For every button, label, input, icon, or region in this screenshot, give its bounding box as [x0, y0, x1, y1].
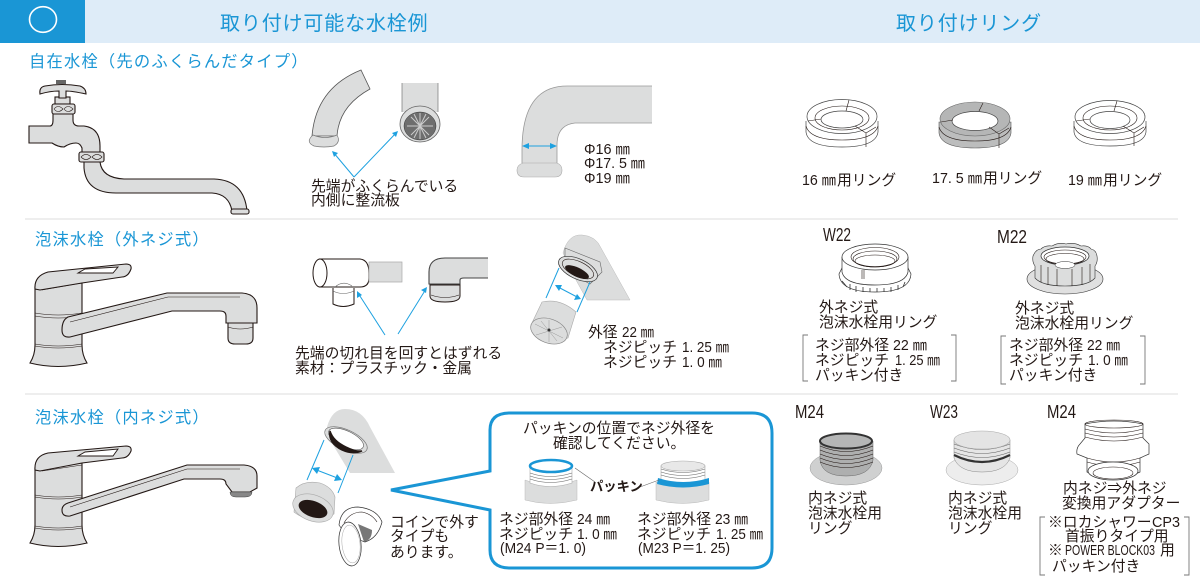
text: external thread spec: 1. 0 ㎜	[682, 355, 722, 371]
icon: spout end with flow plate	[400, 83, 440, 142]
text: adapter name: 変換用アダプター	[1062, 495, 1180, 512]
icon: M24 seat diagram	[525, 460, 577, 504]
text: M22 ring name: 外ネジ式	[1015, 300, 1074, 317]
section title: 外ネジ式: 泡沫水栓（外ネジ式）	[35, 231, 210, 249]
section title: 自在水栓: 自在水栓（先のふくらんだタイプ）	[29, 53, 309, 71]
callout: M22 spec: ネジ部外径	[1009, 337, 1083, 354]
text: M24 spec: (M24 P＝1. 0)	[500, 541, 586, 557]
icon: lever faucet, external thread	[30, 264, 257, 366]
callout: adapter notes	[1040, 515, 1189, 575]
section title: 内ネジ式: 泡沫水栓（内ネジ式）	[35, 409, 210, 427]
text: external thread spec: 22 ㎜	[622, 325, 654, 341]
bubble heading	[523, 420, 715, 452]
text: flared tip note	[311, 178, 458, 209]
callout: M22 spec	[1001, 336, 1145, 384]
text: M24 spec: ネジピッチ	[499, 526, 573, 543]
text: M23 spec: 23 ㎜	[715, 512, 748, 528]
callout: adapter notes: 用	[1160, 543, 1175, 559]
text: M24 spec: 1. 0 ㎜	[577, 527, 617, 543]
text: cut-line note	[295, 345, 502, 377]
text: coin note: タイプも	[390, 528, 449, 545]
header band	[0, 0, 1200, 43]
text: external thread spec: 1. 25 ㎜	[682, 340, 729, 356]
callout: W22 spec	[803, 335, 956, 384]
text: adapter name: 内ネジ⇒外ネジ	[1063, 480, 1167, 497]
callout: M22 spec: 22 ㎜	[1087, 338, 1120, 354]
text: W22 ring name: 外ネジ式	[819, 299, 878, 316]
icon: wall faucet	[29, 80, 249, 214]
text: M23 spec: ネジピッチ	[637, 526, 711, 543]
text: M24 ring name: リング	[808, 520, 853, 537]
text: cut-line note: 素材：プラスチック・金属	[295, 360, 472, 377]
label: M22: M22	[997, 227, 1027, 247]
text: ring size labels: 用リング	[837, 172, 896, 189]
bubble heading: 確認してください。	[553, 435, 685, 452]
icon: lever faucet, internal thread	[30, 446, 257, 546]
text: M22 ring name: 泡沫水栓用リング	[1015, 315, 1134, 332]
text: diameters: Φ19 ㎜	[584, 171, 630, 187]
label: packing: パッキン	[590, 479, 643, 494]
text: ring size labels: 17. 5 ㎜	[932, 171, 982, 187]
callout: M22 spec: 1. 0 ㎜	[1088, 353, 1128, 369]
callout: adapter notes: ※	[1048, 543, 1063, 559]
text: M24 ring name: 内ネジ式	[808, 490, 867, 507]
callout: adapter notes: POWER BLOCK03	[1065, 543, 1155, 559]
text: W23 ring name	[948, 490, 1022, 537]
text: coin note: コインで外す	[390, 514, 479, 531]
text: ring size labels: 16 ㎜	[802, 173, 836, 189]
text: external thread spec	[588, 324, 729, 371]
callout: adapter notes: CP3	[1152, 515, 1180, 531]
callout: W22 spec: ネジピッチ	[815, 352, 889, 369]
callout: M22 spec: ネジピッチ	[1009, 352, 1083, 369]
text: cut-line note: 先端の切れ目を回すとはずれる	[295, 345, 502, 362]
icon: T-shaped tip	[313, 259, 402, 306]
callout: M22 spec: パッキン付き	[1009, 367, 1097, 384]
icon: 19mm ring	[1074, 100, 1146, 146]
text: M23 spec	[637, 511, 763, 557]
header band: 取り付け可能な水栓例	[220, 12, 428, 35]
text: W23 ring name: 内ネジ式	[948, 490, 1007, 507]
icon: bent tip	[429, 258, 488, 302]
icon: M24 adapter	[1077, 420, 1149, 480]
text: adapter name	[1062, 480, 1180, 512]
text: M23 spec: (M23 P＝1. 25)	[638, 541, 730, 557]
text: external thread spec: ネジピッチ	[603, 339, 677, 356]
callout: adapter notes: ※ロカシャワー	[1048, 515, 1152, 531]
text: ring size labels: 用リング	[1103, 172, 1162, 189]
icon: M24 ring	[810, 434, 882, 485]
icon: W23 ring	[946, 431, 1018, 485]
text: W22 ring name	[819, 299, 938, 331]
callout: adapter notes: 首振りタイプ用	[1065, 528, 1169, 545]
icon: W22 ring	[839, 244, 911, 292]
text: diameters: Φ16 ㎜	[584, 142, 630, 158]
arrows: flared tip pointers	[332, 131, 398, 177]
text: diameters: Φ17. 5 ㎜	[584, 156, 645, 172]
callout: adapter notes: パッキン付き	[1052, 558, 1140, 575]
text: M23 spec: ネジ部外径	[637, 511, 711, 528]
text: M24 spec: ネジ部外径	[499, 511, 573, 528]
icon: curved spout	[309, 70, 370, 147]
icon: 17.5mm ring	[939, 102, 1011, 148]
header band: 取り付けリング	[896, 12, 1042, 35]
text: M22 ring name	[1015, 300, 1134, 332]
label: M24 left: M24	[795, 402, 824, 422]
text: flared tip note: 内側に整流板	[311, 192, 400, 209]
icon: exploded aerator, internal thread	[289, 409, 395, 527]
text: W23 ring name: 泡沫水栓用	[948, 505, 1022, 522]
text: W22 ring name: 泡沫水栓用リング	[819, 314, 938, 331]
icon: elbow spout with diameter arrow	[517, 86, 652, 177]
text: external thread spec: 外径	[588, 324, 618, 341]
text: ring size labels	[802, 170, 1162, 189]
text: M24 spec	[499, 511, 617, 557]
callout: W22 spec: ネジ部外径	[815, 337, 889, 354]
text: M24 spec: 24 ㎜	[577, 512, 610, 528]
text: M24 ring name	[808, 490, 882, 537]
text: M24 ring name: 泡沫水栓用	[808, 505, 882, 522]
leader lines	[575, 468, 659, 487]
text: ring size labels: 用リング	[983, 170, 1042, 187]
label: M24 right: M24	[1047, 402, 1076, 422]
arrows: cut-line pointers	[357, 287, 427, 335]
callout: W22 spec: 22 ㎜	[893, 338, 927, 354]
text: ring size labels: 19 ㎜	[1068, 173, 1102, 189]
text: external thread spec: ネジピッチ	[603, 354, 677, 371]
text: coin note: あります。	[390, 544, 463, 561]
label: W22: W22	[823, 225, 851, 245]
text: M23 spec: 1. 25 ㎜	[716, 527, 763, 543]
callout: W22 spec: 1. 25 ㎜	[895, 353, 940, 369]
label: W23: W23	[930, 402, 958, 422]
text: coin note	[390, 514, 479, 561]
bubble heading: パッキンの位置でネジ外径を	[523, 420, 715, 437]
icon: 16mm ring	[806, 100, 878, 147]
text: flared tip note: 先端がふくらんでいる	[311, 178, 458, 195]
icon: coin-removable aerator	[337, 507, 382, 567]
text: W23 ring name: リング	[948, 520, 993, 537]
icon: M23 seat diagram	[656, 461, 709, 504]
callout bubble	[391, 413, 772, 568]
icon: exploded aerator, external thread	[527, 235, 630, 349]
callout: W22 spec: パッキン付き	[815, 367, 903, 384]
text: diameters	[584, 142, 645, 187]
icon: M22 ring	[1027, 243, 1103, 294]
